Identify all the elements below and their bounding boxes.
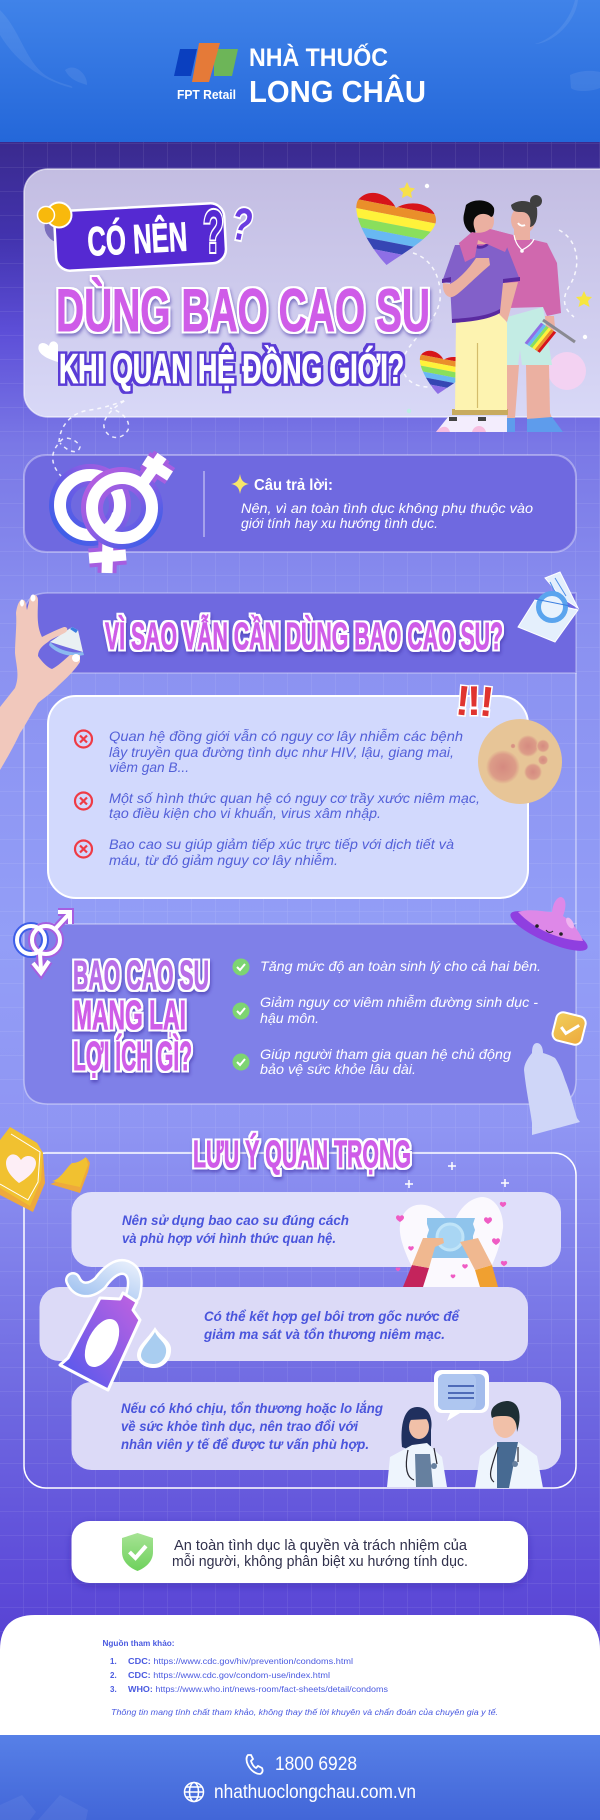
right person	[459, 195, 575, 432]
brand name: NHÀ THUỐC	[249, 42, 388, 72]
phone number: 1800 6928	[275, 1754, 357, 1775]
footer	[0, 1735, 600, 1820]
dashed curves	[403, 253, 440, 387]
disclaimer: Thông tin mang tính chất tham khảo, không thay thế lời khuyên và chẩn đoán của chuyên gia y tế.	[111, 1708, 498, 1717]
brand name	[249, 42, 426, 109]
references list	[110, 1657, 388, 1694]
icon: condom shape	[524, 1043, 580, 1135]
reason 3: máu, từ đó giảm nguy cơ lây nhiễm.	[109, 852, 338, 868]
panel: benefits	[17, 897, 592, 1135]
note card 3	[72, 1370, 561, 1488]
icon: gender symbols	[60, 456, 170, 573]
benefit 2	[232, 994, 538, 1026]
benefit 3: Giúp người tham gia quan hệ chủ động	[260, 1046, 511, 1062]
note card 1: Nên sử dụng bao cao su đúng cách	[122, 1212, 349, 1228]
rainbow heart small	[398, 324, 495, 413]
logo: FPT Retail	[174, 43, 238, 102]
panel: why	[0, 572, 578, 924]
left person	[436, 200, 520, 432]
references heading: Nguồn tham khảo:	[102, 1639, 174, 1648]
rainbow heart large	[320, 149, 481, 296]
benefit 2: hậu môn.	[260, 1010, 319, 1026]
references list: 3.	[110, 1685, 117, 1694]
pride flag	[525, 320, 575, 353]
benefit 1: Tăng mức độ an toàn sinh lý cho cả hai bên.	[260, 958, 541, 974]
icon: globe	[184, 1782, 204, 1802]
icon: check badge	[551, 1011, 587, 1046]
reason 2	[75, 790, 480, 821]
note card 1	[72, 1192, 561, 1287]
references list: 1.	[110, 1657, 117, 1666]
callout: safety message	[72, 1521, 528, 1583]
divider	[203, 471, 205, 537]
icon: condom pack	[518, 572, 578, 642]
safety text: An toàn tình dục là quyền và trách nhiệm của	[174, 1537, 468, 1554]
website: nhathuoclongchau.com.vn	[214, 1782, 416, 1803]
benefit 3	[232, 1046, 511, 1077]
stars and dots	[399, 182, 592, 413]
hero panel	[24, 149, 600, 442]
benefit 2: Giảm nguy cơ viêm nhiễm đường sinh dục -	[260, 994, 538, 1010]
reasons card	[48, 676, 562, 898]
yellow ball	[38, 202, 72, 228]
benefits heading: LỢI ÍCH GÌ?	[73, 1033, 192, 1079]
section heading: LƯU Ý QUAN TRỌNG	[193, 1132, 411, 1176]
reason 2: tạo điều kiện cho vi khuẩn, virus xâm nhập.	[109, 805, 381, 821]
icon: exclamation marks: !	[477, 677, 496, 726]
answer text: giới tính hay xu hướng tình dục.	[241, 515, 438, 531]
answer text: Nên, vì an toàn tình dục không phụ thuộc vào	[241, 500, 533, 516]
icon: female doctor	[387, 1407, 447, 1487]
icon: skin lesions	[478, 719, 562, 804]
sparkles	[405, 1162, 509, 1188]
references list: CDC: https://www.cdc.gov/condom-use/index.html	[128, 1671, 330, 1680]
reason 1: viêm gan B...	[109, 759, 189, 775]
note card 3: Nếu có khó chịu, tổn thương hoặc lo lắng	[121, 1399, 383, 1416]
reason 2: Một số hình thức quan hệ có nguy cơ trầy xước niêm mạc,	[109, 790, 480, 806]
dashed loop continuation	[53, 438, 80, 477]
icon: cute condom	[506, 897, 592, 958]
icon: male doctor	[475, 1401, 543, 1488]
note card 2: giảm ma sát và tổn thương niêm mạc.	[203, 1326, 445, 1342]
dashed loop	[59, 400, 129, 442]
reason 1	[75, 728, 463, 775]
header band	[0, 0, 600, 142]
reason 1: Quan hệ đồng giới vẫn có nguy cơ lây nhiễm các bệnh	[109, 728, 463, 744]
icon: lubricant tube	[60, 1267, 171, 1390]
note card 3: nhân viên y tế để được tư vấn phù hợp.	[121, 1436, 369, 1452]
title line 2: KHI QUAN HỆ ĐỒNG GIỚI?	[59, 344, 404, 392]
panel: notes	[0, 1127, 600, 1820]
panel: references	[0, 1615, 600, 1745]
benefits heading: MANG LẠI	[73, 992, 186, 1038]
question marks	[203, 197, 257, 265]
safety text: mỗi người, không phân biệt xu hướng tính dục.	[172, 1553, 468, 1570]
answer heading: Câu trả lời:	[254, 477, 333, 494]
reason 1: lây truyền qua đường tình dục như HIV, lậu, giang mai,	[109, 744, 454, 760]
badge: có nên	[38, 197, 257, 272]
references list: WHO: https://www.who.int/news-room/fact-sheets/detail/condoms	[128, 1685, 388, 1694]
icon: exclamation marks: !	[454, 676, 472, 725]
references list: CDC: https://www.cdc.gov/hiv/prevention/condoms.html	[128, 1657, 353, 1666]
icon: hand holding condom	[0, 594, 84, 770]
note card 1: và phù hợp với hình thức quan hệ.	[122, 1230, 336, 1246]
icon: small gender symbols	[17, 912, 70, 973]
decorative white heart	[38, 341, 58, 362]
note card 2	[40, 1287, 528, 1361]
question marks: ?	[203, 198, 224, 265]
benefits heading	[73, 952, 209, 1079]
icon: shield	[122, 1533, 153, 1571]
icon: speech bubble	[434, 1370, 489, 1421]
brand name: LONG CHÂU	[249, 73, 426, 109]
badge: có nên: CÓ NÊN	[86, 214, 188, 265]
reason 3: Bao cao su giúp giảm tiếp xúc trực tiếp với dịch tiết và	[109, 836, 454, 852]
panel: answer	[24, 438, 576, 573]
benefits heading: BAO CAO SU	[73, 952, 209, 998]
note card 3: về sức khỏe tình dục, nên trao đổi với	[121, 1418, 359, 1434]
references list: 2.	[110, 1671, 117, 1680]
icon: sparkle	[231, 474, 249, 494]
note card 2: Có thể kết hợp gel bôi trơn gốc nước để	[204, 1308, 460, 1324]
answer text	[241, 500, 533, 531]
icon: phone	[246, 1755, 263, 1774]
embracing arm	[459, 229, 513, 262]
question marks: ?	[227, 197, 257, 252]
icon: hands holding condom	[396, 1197, 507, 1287]
icon: exclamation marks: !	[467, 677, 481, 724]
reason 3	[75, 836, 454, 868]
side outline	[24, 673, 576, 924]
benefit 3: bảo vệ sức khỏe lâu dài.	[260, 1061, 416, 1077]
safety text	[172, 1537, 468, 1570]
couple illustration	[436, 195, 575, 432]
logo: FPT Retail: FPT Retail	[177, 87, 236, 102]
section header band	[24, 593, 576, 673]
icon: exclamation marks	[454, 676, 496, 726]
icon: candy condom wrappers	[0, 1127, 90, 1212]
